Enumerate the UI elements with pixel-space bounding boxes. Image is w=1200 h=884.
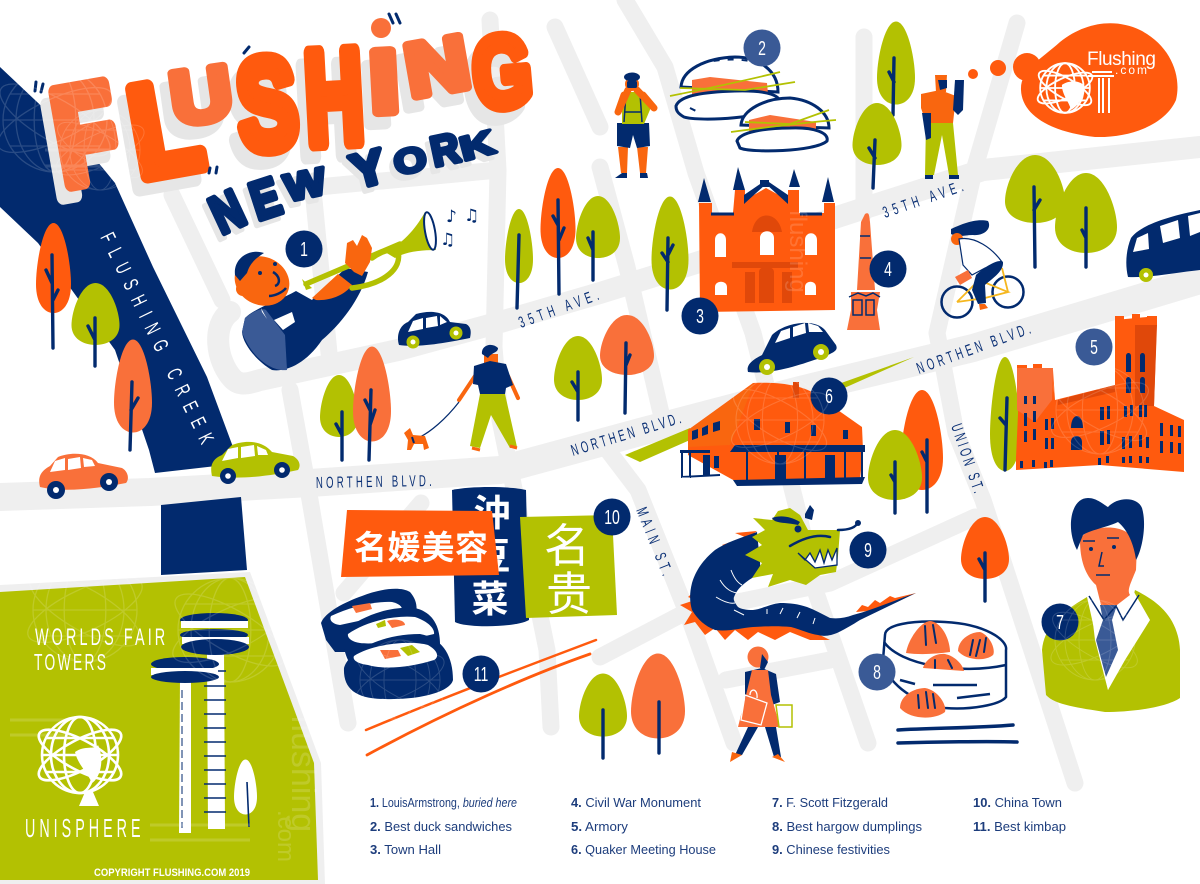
title: New York: [198, 123, 499, 252]
tree: [868, 430, 922, 513]
street labels: NORTHEN BLVD.: [569, 409, 683, 459]
number badge 6: 6: [825, 384, 833, 408]
title: Flushing: G: [468, 13, 536, 130]
title shadow: G: [460, 26, 528, 143]
title: Flushing: I: [367, 32, 401, 131]
title: Flushing: L: [120, 53, 211, 205]
title shadow: F: [35, 68, 120, 226]
title shadow: [35, 26, 528, 226]
legend column 4: [973, 795, 1066, 834]
title: Flushing: N: [399, 20, 476, 114]
label: worlds fair towers: TOWERS: [34, 651, 106, 676]
number badge 6: [810, 378, 848, 414]
legend column 3: 7. F. Scott Fitzgerald: [772, 795, 888, 810]
title shadow: S: [224, 45, 295, 191]
illustration: cyclist: [942, 220, 1024, 318]
number badge 5: [1076, 328, 1112, 366]
copyright: COPYRIGHT FLUSHING.COM 2019: [94, 867, 250, 879]
number badge 5: 5: [1090, 335, 1098, 359]
street labels: 35TH AVE.: [516, 286, 601, 331]
sign: navy: [452, 487, 529, 626]
music notes: ♫: [464, 206, 479, 226]
tree: [961, 517, 1009, 601]
label: worlds fair towers: [34, 624, 165, 676]
legend column 1: 1. LouisArmstrong, buried here: [370, 795, 517, 810]
illustration: armory: [1016, 314, 1184, 472]
tree: [576, 196, 620, 280]
title: Flushing: F: [43, 55, 128, 213]
label: worlds fair towers: WORLDS FAIR: [35, 624, 165, 651]
number badge 10: [594, 498, 630, 536]
short tower: [151, 657, 219, 833]
sign: lime: 名: [544, 520, 590, 572]
subtitle shadow: N: [198, 186, 250, 252]
sign: navy: 沖: [474, 493, 510, 534]
icon: lime taxi: [211, 442, 300, 484]
tree: [652, 196, 688, 310]
logo wordmark: Flushing: [1087, 49, 1156, 70]
dragon fins: [680, 531, 916, 640]
illustration: man with phone: [921, 75, 964, 179]
number badge 9: [850, 532, 886, 568]
illustration: duck sandwiches: [670, 57, 836, 151]
title shadow: I: [359, 45, 393, 144]
street labels: NORTHEN BLVD.: [914, 319, 1033, 377]
legend column 2: 5. Armory: [571, 819, 628, 834]
legend column 1: [370, 795, 517, 857]
icon: bus: [1126, 210, 1200, 282]
sign: lime: 贵: [546, 568, 592, 620]
legend column 2: 6. Quaker Meeting House: [571, 842, 716, 857]
number badge 7: [1042, 604, 1078, 640]
title: Flushing: S: [232, 32, 303, 178]
title: New York: K: [456, 123, 499, 168]
subtitle shadow: E: [239, 173, 284, 238]
title: New York: N: [202, 180, 254, 246]
trees: left of creek: [36, 223, 71, 348]
number badge 8: 8: [873, 660, 881, 684]
tree: [72, 283, 120, 366]
number badge 11: [462, 656, 500, 692]
tree: white: [234, 760, 257, 827]
number badge 1: 1: [300, 237, 308, 261]
illustration: quaker meeting house: [625, 357, 914, 486]
title: New York: Y: [345, 140, 391, 199]
sign: navy: 豆: [474, 536, 510, 577]
watermarks: flushing: [784, 210, 811, 293]
illustration: town hall: [698, 167, 835, 312]
title: New York: E: [243, 167, 288, 232]
tree: [353, 346, 391, 460]
legend column 3: 8. Best hargow dumplings: [772, 819, 922, 834]
legend column 3: [772, 795, 922, 857]
legend column 1: 3. Town Hall: [370, 842, 441, 857]
watermarks: .com: [272, 810, 299, 862]
title: Flushing: [35, 13, 536, 226]
legend column 1: 2. Best duck sandwiches: [370, 819, 512, 834]
signs: China Town: [341, 487, 617, 626]
roll: top: [321, 589, 417, 652]
illustration: kimbap: [321, 589, 453, 699]
tree: [852, 103, 902, 188]
icon: dog: [404, 428, 429, 450]
subtitle shadow: O: [386, 145, 426, 189]
trumpet: [302, 211, 438, 290]
number badge 2: 2: [758, 36, 766, 60]
music notes: ♫: [440, 230, 455, 250]
icon: navy taxi on Northern Blvd: [748, 323, 837, 375]
number badge 7: 7: [1056, 610, 1064, 634]
title: Flushing: U: [165, 50, 237, 141]
label: Flushing Creek: FLUSHING CREEK: [96, 229, 219, 448]
illustration: dog walker: [404, 345, 518, 450]
tree: [554, 336, 602, 420]
street labels: UNION ST.: [948, 421, 988, 495]
legend column 2: 4. Civil War Monument: [571, 795, 701, 810]
icon: unisphere: [32, 717, 128, 806]
sign: lime: [520, 515, 617, 620]
tree: [579, 674, 627, 758]
logo: Flushing.com: .com: [1115, 63, 1147, 77]
subtitle shadow: R: [422, 129, 460, 182]
tree: [877, 22, 915, 115]
sign: orange: [341, 510, 499, 577]
legend column 4: 11. Best kimbap: [973, 819, 1066, 834]
title: New York: O: [390, 139, 430, 183]
number badge 4: [870, 250, 906, 288]
tree: [1055, 173, 1117, 267]
number badge 11: 11: [474, 662, 488, 686]
number badge 8: [858, 654, 896, 690]
street labels: MAIN ST.: [633, 505, 676, 578]
tree: [600, 315, 654, 413]
number badge 9: 9: [864, 538, 872, 562]
subtitle shadow: K: [452, 129, 495, 174]
number badge 10: 10: [604, 505, 620, 529]
tree: [1005, 155, 1065, 267]
music notes: ♪: [446, 207, 457, 227]
title shadow: U: [157, 63, 229, 154]
icon: navy taxi: [398, 312, 471, 348]
number badge 3: 3: [696, 304, 704, 328]
logo globe: [1034, 63, 1096, 113]
subtitle shadow: W: [277, 165, 326, 216]
tree: [631, 654, 685, 753]
illustration: trumpet player: [226, 206, 479, 370]
chopsticks: [366, 640, 596, 755]
icon: orange taxi: [39, 454, 128, 499]
title shadow: L: [112, 66, 203, 218]
number badge 2: [744, 30, 780, 66]
tree: [505, 209, 533, 308]
illustration: photographer: [615, 72, 654, 178]
tree: [901, 390, 943, 512]
label: unisphere: UNISPHERE: [25, 815, 141, 843]
dragon body: [690, 532, 916, 636]
tree: [540, 168, 576, 294]
illustration: F. Scott Fitzgerald: [1042, 498, 1180, 712]
title shadow: H: [293, 36, 359, 186]
dragon head: [745, 508, 840, 587]
title: New York: R: [426, 123, 464, 176]
number badge 4: 4: [884, 257, 892, 281]
legend column 3: 9. Chinese festivities: [772, 842, 890, 857]
sign: navy: 菜: [472, 579, 508, 620]
lime streak: [625, 357, 914, 462]
park panel: worlds fair: [0, 572, 325, 884]
number badge 3: [682, 298, 718, 334]
legend column 4: 10. China Town: [973, 795, 1062, 810]
sign: orange: 名媛美容: [354, 529, 488, 566]
street labels: NORTHEN BLVD.: [316, 471, 432, 492]
title: New York: W: [281, 159, 330, 210]
legend column 2: [571, 795, 716, 857]
title: Flushing: H: [301, 23, 367, 173]
title shadow: N: [391, 33, 468, 127]
face: [226, 247, 298, 315]
creek continuation block: [161, 497, 247, 575]
subtitle shadow: Y: [341, 146, 387, 205]
legend: [370, 795, 1066, 857]
number badge 1: [286, 230, 322, 268]
logo pillars: [1088, 72, 1114, 113]
subtitle shadow: [198, 129, 495, 252]
Flushing Creek: [0, 67, 233, 473]
roll: middle: [344, 608, 440, 675]
watermarks: flushing: [284, 715, 322, 832]
tall tower: [180, 613, 249, 829]
illustration: dragon: [680, 505, 916, 640]
street labels: [316, 177, 1033, 578]
roll: bottom: [344, 634, 453, 699]
illustration: hargow dumplings: [883, 621, 1017, 743]
tree: [990, 357, 1020, 471]
logo: Flushing.com: [968, 23, 1178, 137]
tree: [320, 375, 358, 460]
street labels: 35TH AVE.: [880, 177, 966, 221]
illustration: civil war monument: [847, 213, 880, 330]
illustration: shopper: [730, 646, 792, 762]
tree: [114, 340, 152, 450]
